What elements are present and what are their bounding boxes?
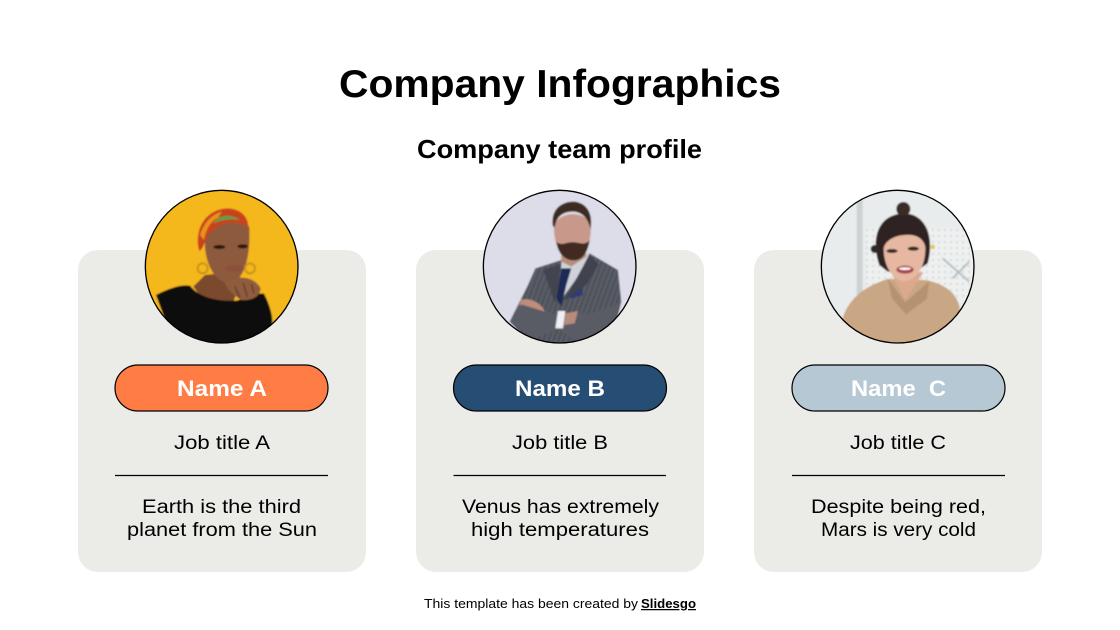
name pill A: Name A: [177, 376, 267, 401]
description C: [811, 497, 986, 541]
description B: Venus has extremely: [462, 497, 660, 518]
name pill C: [792, 365, 1005, 411]
card background C: [754, 250, 1042, 572]
description A: Earth is the third: [142, 497, 301, 518]
description C: Despite being red,: [811, 497, 986, 518]
photo: man in grey suit: [482, 190, 637, 344]
footer credit: Slidesgo: [641, 597, 696, 611]
name pill B: [454, 365, 666, 411]
job title B: Job title B: [512, 433, 608, 454]
description A: [127, 497, 317, 541]
panel: profile A: [78, 185, 366, 572]
description C: Mars is very cold: [821, 520, 976, 541]
subtitle: Company team profile: [417, 134, 702, 164]
description B: [462, 497, 660, 541]
job title A: Job title A: [174, 433, 270, 454]
panel: profile B: [416, 185, 704, 572]
panel: profile C: [754, 185, 1042, 572]
photo: woman in beige shirt: [820, 190, 975, 344]
description A: planet from the Sun: [127, 520, 317, 541]
card background B: [416, 250, 704, 572]
name pill C: Name C: [851, 376, 946, 401]
footer credit: This template has been created by: [424, 597, 639, 611]
name pill A: [115, 365, 328, 411]
title: Company Infographics: [339, 63, 781, 106]
photo: woman in headwrap: [144, 190, 299, 344]
card background A: [78, 250, 366, 572]
name pill B: Name B: [515, 376, 605, 401]
description B: high temperatures: [471, 520, 649, 541]
job title C: Job title C: [850, 433, 946, 454]
